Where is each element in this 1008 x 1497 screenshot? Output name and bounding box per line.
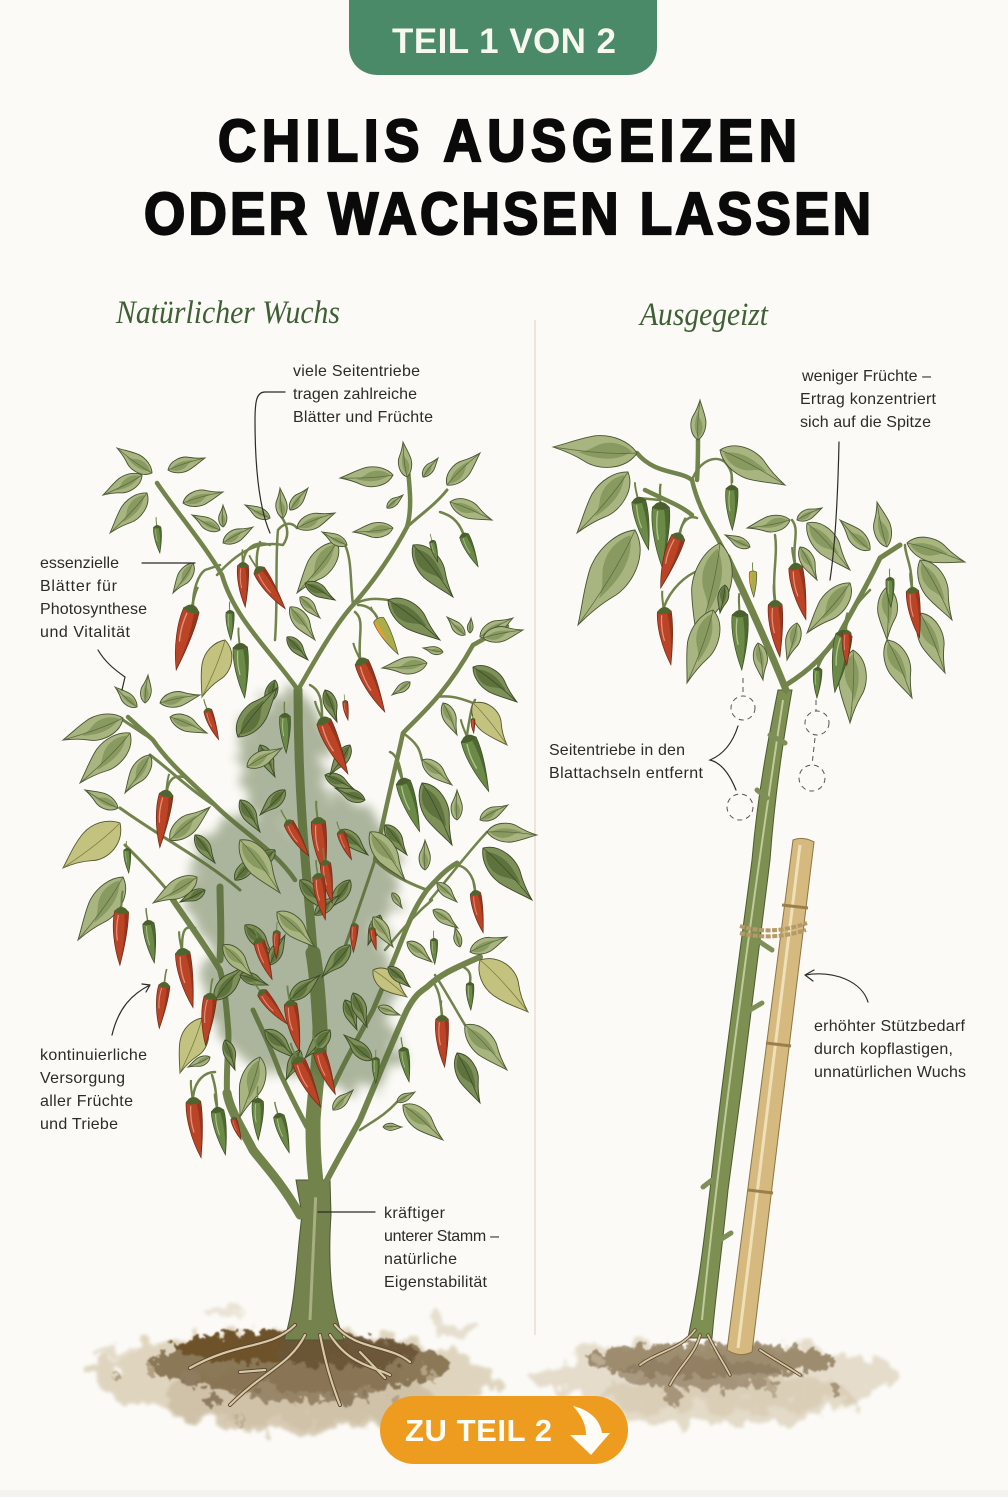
callout: erhöhter Stützbedarf <box>805 970 966 1081</box>
button: Zu Teil 2 <box>380 1396 628 1464</box>
soil: left <box>89 1304 495 1434</box>
icon: curved arrow <box>570 1406 610 1455</box>
callout: erhöhter Stützbedarf: durch kopflastigen, <box>814 1041 953 1058</box>
callout: viele Seitentriebe: viele Seitentriebe <box>293 363 420 380</box>
callout: essenzielle Blätter <box>40 555 195 690</box>
center divider <box>534 320 536 1335</box>
callout: weniger Früchte: Ertrag konzentriert <box>800 391 937 408</box>
callout: weniger Früchte: weniger Früchte – <box>801 368 931 385</box>
roots <box>190 1325 410 1405</box>
dense foliage mass <box>188 690 400 1090</box>
callout: kontinuierliche Versorgung: und Triebe <box>40 1116 118 1133</box>
left plant <box>54 441 542 1405</box>
callout: Seitentriebe entfernt: Blattachseln entfernt <box>549 765 704 782</box>
callout: kontinuierliche Versorgung: kontinuierliche <box>40 1047 147 1064</box>
callout: essenzielle Blätter: essenzielle <box>40 555 119 572</box>
callout: erhöhter Stützbedarf: unnatürlichen Wuchs <box>814 1064 966 1081</box>
callout: kontinuierliche Versorgung: aller Früchte <box>40 1093 133 1110</box>
badge: Teil 1 von 2: TEIL 1 VON 2 <box>392 22 616 61</box>
roots <box>640 1330 800 1385</box>
callout: viele Seitentriebe <box>255 363 433 533</box>
heading: Natürlicher Wuchs: Natürlicher Wuchs <box>115 295 340 331</box>
right plant <box>552 400 969 1385</box>
callout: kräftiger Stamm: Eigenstabilität <box>384 1274 488 1291</box>
callout: weniger Früchte <box>800 368 937 580</box>
callout: viele Seitentriebe: tragen zahlreiche <box>293 386 417 403</box>
plant tie <box>740 923 807 936</box>
leaves <box>552 400 969 724</box>
callout: weniger Früchte: sich auf die Spitze <box>800 414 931 431</box>
callout: kontinuierliche Versorgung <box>40 984 150 1133</box>
peppers <box>110 517 495 1159</box>
callout: essenzielle Blätter: Photosynthese <box>40 601 147 618</box>
callout: kontinuierliche Versorgung: Versorgung <box>40 1070 125 1087</box>
callout: erhöhter Stützbedarf: erhöhter Stützbedarf <box>814 1018 966 1035</box>
callout: kräftiger Stamm: kräftiger <box>384 1205 446 1222</box>
leaves <box>54 441 542 1147</box>
title <box>144 107 871 247</box>
callout: essenzielle Blätter: Blätter für <box>40 578 118 595</box>
callout: essenzielle Blätter: und Vitalität <box>40 624 131 641</box>
title: ODER WACHSEN LASSEN <box>144 180 871 247</box>
stem <box>637 440 912 1338</box>
callout: kräftiger Stamm: unterer Stamm – <box>384 1228 499 1245</box>
callout: Seitentriebe entfernt: Seitentriebe in den <box>549 742 685 759</box>
soil: right <box>530 1343 900 1424</box>
title: CHILIS AUSGEIZEN <box>218 107 797 174</box>
callout: kräftiger Stamm <box>318 1205 499 1291</box>
button: Zu Teil 2: ZU TEIL 2 <box>405 1413 552 1448</box>
callout: kräftiger Stamm: natürliche <box>384 1251 457 1268</box>
removed shoots: dashed circles <box>727 678 829 820</box>
badge: Teil 1 von 2 <box>349 0 657 75</box>
callout: viele Seitentriebe: Blätter und Früchte <box>293 409 433 426</box>
stems and trunk <box>120 470 507 1340</box>
heading: Ausgegeizt: Ausgegeizt <box>638 297 769 333</box>
callout: Seitentriebe entfernt <box>549 726 738 790</box>
bamboo stake <box>727 838 814 1355</box>
peppers <box>628 472 923 698</box>
